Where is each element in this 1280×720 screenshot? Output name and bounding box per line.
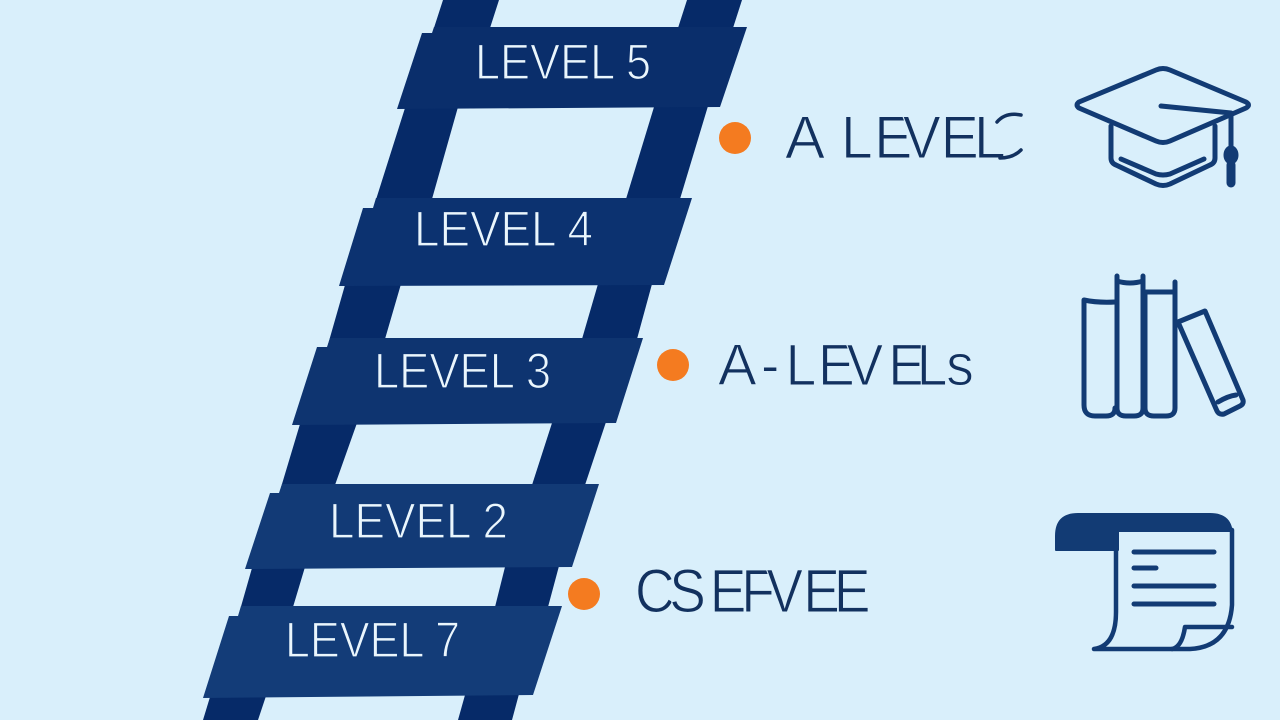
ladder bbox=[203, 0, 747, 720]
right ladder rail bbox=[458, 0, 742, 720]
marker dot: A-levels bbox=[657, 349, 689, 381]
icon: certificate scroll bbox=[1056, 514, 1232, 649]
marker dot: A level bbox=[719, 122, 751, 154]
rung: level 3 bbox=[292, 338, 643, 425]
label: A LEVEL: A bbox=[785, 104, 825, 171]
label: A-LEVELs: -LEVELs bbox=[761, 333, 974, 397]
rung: level 5: LEVEL 5 bbox=[475, 34, 651, 90]
rung: level 7: LEVEL 7 bbox=[285, 612, 460, 668]
label: CSEFVEE: CSEFVEE bbox=[635, 557, 871, 626]
rung: level 5 bbox=[397, 27, 747, 109]
rung: level 4: LEVEL 4 bbox=[414, 201, 593, 257]
rung: level 2: LEVEL 2 bbox=[329, 493, 508, 549]
icon: books bbox=[1084, 276, 1243, 416]
marker dot: GCSE bbox=[568, 578, 600, 610]
rung: level 7 bbox=[203, 606, 562, 698]
icon: graduation cap bbox=[1077, 68, 1248, 186]
left ladder rail bbox=[203, 0, 499, 720]
rung: level 4 bbox=[339, 198, 692, 286]
rung: level 3: LEVEL 3 bbox=[374, 343, 551, 399]
label: A-LEVELs: A bbox=[718, 333, 757, 398]
label: A LEVEL: LEVEL bbox=[841, 105, 1006, 171]
rung: level 2 bbox=[245, 484, 599, 569]
label: A LEVEL bbox=[785, 104, 1021, 171]
